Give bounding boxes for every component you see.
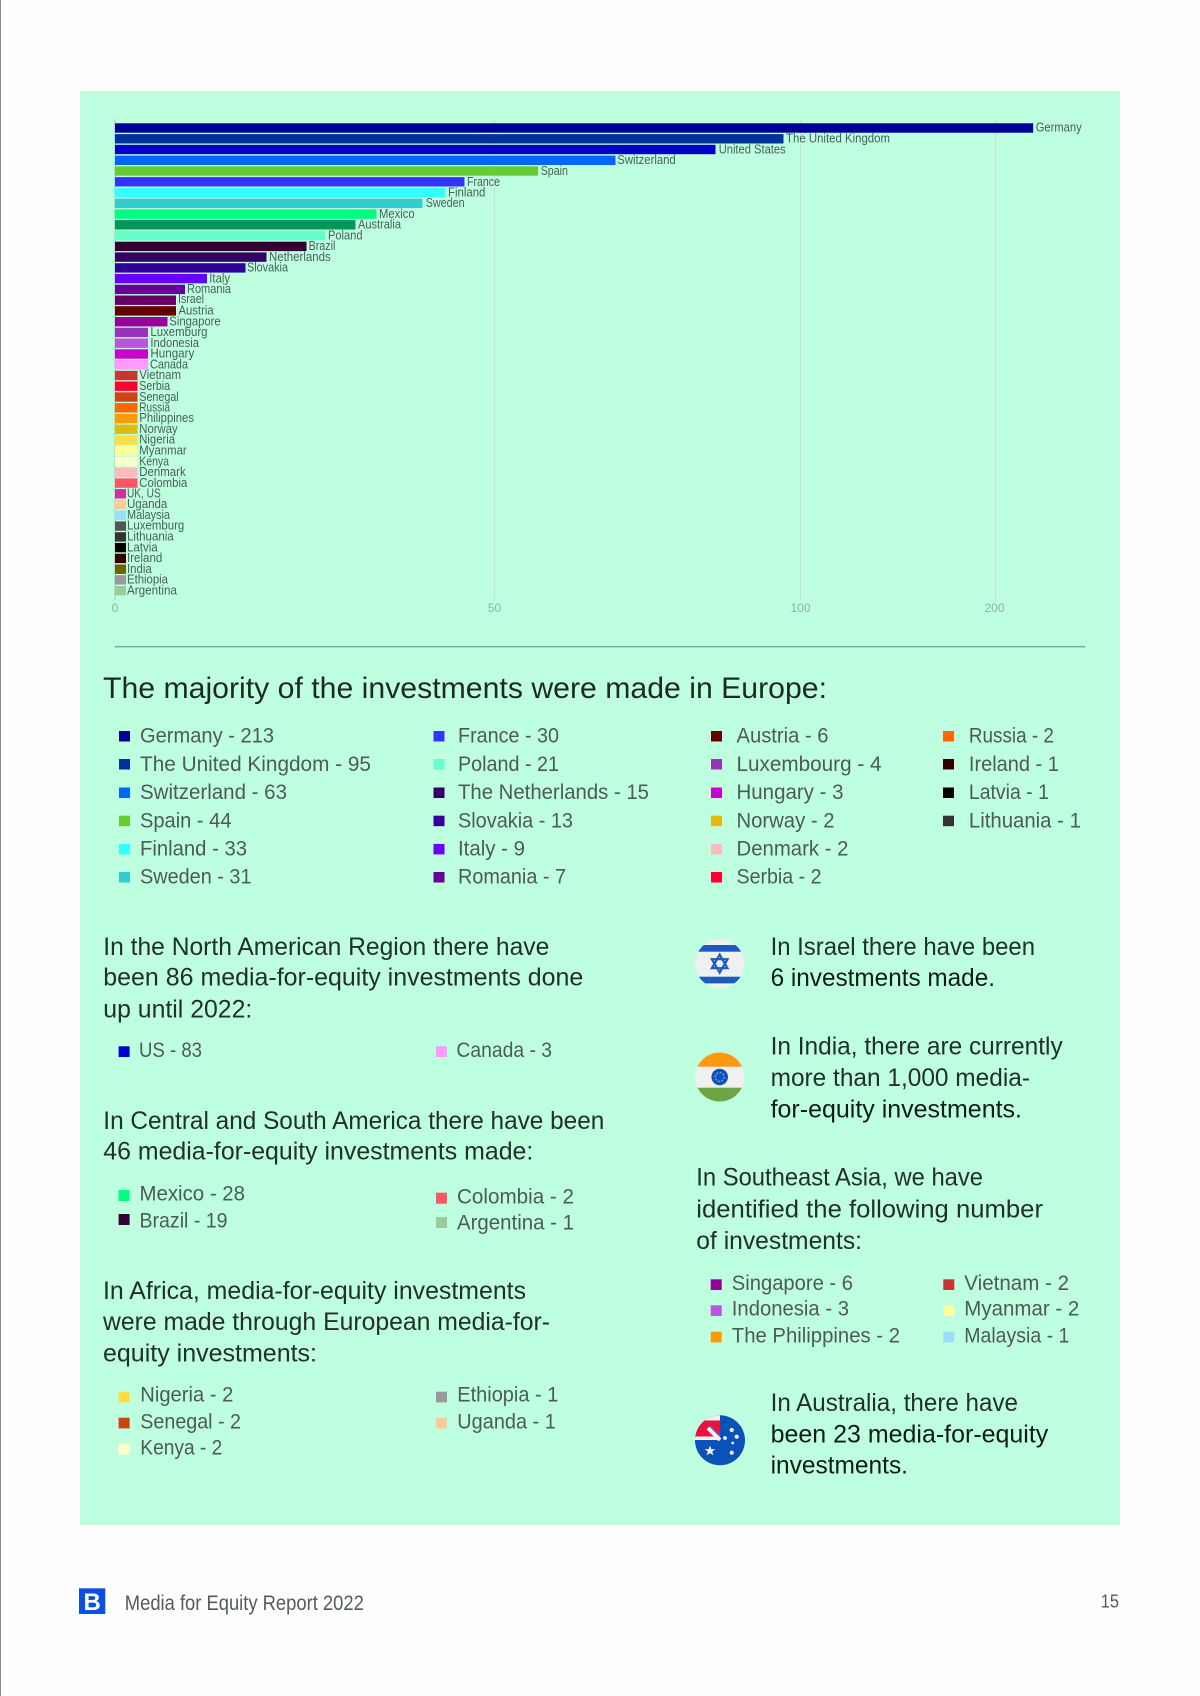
bar: Mexico: Mexico: [379, 207, 415, 221]
legend: Central and South America: Mexico - 28: [140, 1183, 245, 1206]
text block: North America: been 86 media-for-equity investments done: [103, 964, 583, 992]
legend: Southeast Asia: Indonesia - 3: [732, 1298, 849, 1321]
chart x axis labels: 100: [790, 601, 811, 615]
bar: Austria: Austria: [178, 304, 214, 318]
bar: Slovakia: Slovakia: [247, 260, 288, 274]
bar: Brazil: Brazil: [309, 239, 335, 253]
bar: Uganda: Uganda: [127, 497, 167, 511]
text block: North America: [103, 933, 583, 1024]
bar: Germany: Germany: [1036, 120, 1082, 134]
bar: Lithuania: Lithuania: [127, 530, 174, 544]
legend column 4: Lithuania - 1: [969, 809, 1081, 832]
bar: Mexico: [115, 207, 415, 221]
bar: Israel: Israel: [178, 292, 204, 306]
bar: Ireland: Ireland: [127, 551, 162, 565]
legend column 4: Russia - 2: [969, 725, 1054, 748]
bar: Senegal: Senegal: [139, 390, 179, 404]
bar: Vietnam: [115, 368, 181, 382]
bar: Colombia: [115, 476, 187, 490]
bar: Slovakia: [115, 260, 288, 274]
legend column 1: Germany - 213: [140, 725, 274, 748]
legend: Southeast Asia: Myanmar - 2: [964, 1298, 1079, 1321]
bar: Finland: [115, 186, 485, 200]
bar: Latvia: [115, 540, 158, 554]
bar: Nigeria: [115, 433, 175, 447]
text block: Central and South America: 46 media-for-equity investments made:: [103, 1138, 533, 1166]
legend: Africa: Kenya - 2: [140, 1437, 222, 1460]
bar: Brazil: [115, 239, 335, 253]
legend column 3: Austria - 6: [736, 725, 828, 748]
bar: France: [115, 175, 500, 189]
legend: Africa: Senegal - 2: [140, 1411, 241, 1434]
text block: Australia: In Australia, there have: [771, 1389, 1018, 1417]
text block: North America: In the North American Region there have: [103, 933, 549, 961]
bar: Argentina: Argentina: [127, 583, 177, 597]
bar: Luxemburg (second entry): Luxemburg: [127, 519, 184, 533]
bar: India: India: [127, 562, 152, 576]
icon: report logo: B: [84, 1589, 101, 1616]
bar: Kenya: Kenya: [139, 454, 169, 468]
bar: Philippines: Philippines: [139, 411, 194, 425]
text block: India: more than 1,000 media-: [771, 1064, 1030, 1092]
panel: investments overview: [80, 91, 1120, 1525]
bar: Austria: [115, 304, 214, 318]
text block: Southeast Asia: identified the following number: [696, 1195, 1043, 1223]
legend column 2: [434, 725, 649, 888]
text block: Australia: been 23 media-for-equity: [771, 1420, 1049, 1448]
legend: Central and South America: Argentina - 1: [457, 1211, 574, 1234]
legend column 1: Spain - 44: [140, 809, 232, 832]
bar: Israel: [115, 292, 204, 306]
bar: Indonesia: [115, 336, 199, 350]
bar: Norway: [115, 422, 178, 436]
bar: Russia: Russia: [139, 400, 170, 414]
bar: Russia: [115, 400, 170, 414]
bar: Singapore: Singapore: [169, 314, 221, 328]
bar: Colombia: Colombia: [139, 476, 187, 490]
bar: Myanmar: [115, 443, 187, 457]
bar: Spain: [115, 164, 568, 178]
bar: Spain: Spain: [541, 164, 568, 178]
bar: Singapore: [115, 314, 221, 328]
legend column 2: The Netherlands - 15: [458, 781, 649, 804]
footer: [79, 1588, 1119, 1616]
legend: Central and South America: Brazil - 19: [140, 1209, 228, 1232]
bar: The United Kingdom: [115, 132, 890, 146]
bar: Poland: Poland: [328, 228, 363, 242]
text block: Southeast Asia: [696, 1164, 1043, 1255]
chart x axis labels: 200: [984, 601, 1005, 615]
bar: Denmark: Denmark: [139, 465, 186, 479]
bar: Italy: Italy: [209, 272, 231, 286]
bar: Indonesia: Indonesia: [150, 336, 199, 350]
chart x axis labels: 50: [488, 601, 501, 615]
legend column 3: Norway - 2: [736, 809, 834, 832]
bar: France: France: [467, 175, 500, 189]
text block: Africa: equity investments:: [103, 1340, 317, 1368]
chart x axis labels: 0: [112, 601, 119, 615]
legend: Southeast Asia: Singapore - 6: [732, 1272, 853, 1295]
icon: report logo: [79, 1588, 105, 1616]
legend column 2: Romania - 7: [458, 865, 566, 888]
legend column 2: France - 30: [458, 725, 559, 748]
legend column 1: The United Kingdom - 95: [140, 753, 371, 776]
text block: Southeast Asia: In Southeast Asia, we have: [696, 1164, 983, 1192]
bar: Netherlands: [115, 250, 331, 264]
text block: Central and South America: [103, 1107, 604, 1166]
chart: investments per country bar chart: [112, 119, 1082, 615]
text block: Israel: 6 investments made.: [771, 964, 995, 992]
legend column 3: Serbia - 2: [736, 865, 822, 888]
legend: North America: US - 83: [139, 1039, 202, 1062]
text block: Southeast Asia: of investments:: [696, 1227, 862, 1255]
bar: Philippines: [115, 411, 194, 425]
bar: Sweden: [115, 196, 465, 210]
bar: Poland: [115, 228, 363, 242]
bar: Netherlands: Netherlands: [269, 250, 331, 264]
legend column 3: [711, 725, 882, 888]
legend: Southeast Asia: [711, 1272, 1079, 1348]
heading: Europe: The majority of the investments were made in Europe:: [103, 672, 827, 705]
bar: Italy: [115, 272, 231, 286]
bar: UK, US: UK, US: [127, 486, 161, 500]
text block: Israel: In Israel there have been: [771, 933, 1035, 961]
legend: Southeast Asia: Vietnam - 2: [964, 1272, 1069, 1295]
legend column 1: Finland - 33: [140, 837, 247, 860]
legend column 3: Hungary - 3: [736, 781, 844, 804]
bar: Hungary: Hungary: [150, 347, 195, 361]
text block: Israel: [771, 933, 1035, 992]
bar: Switzerland: [115, 153, 676, 167]
bar: Malaysia: Malaysia: [127, 508, 170, 522]
bar: Australia: Australia: [358, 218, 401, 232]
bar: Germany: [115, 120, 1082, 134]
bar: Canada: [115, 357, 188, 371]
bar: Sweden: Sweden: [426, 196, 465, 210]
icon: Israel flag: [695, 939, 745, 988]
legend column 2: Italy - 9: [458, 837, 525, 860]
bar: India: [115, 562, 152, 576]
legend: Europe country list: [119, 725, 1081, 888]
legend: Africa: Nigeria - 2: [140, 1384, 233, 1407]
bar: UK, US: [115, 486, 161, 500]
bar: Kenya: [115, 454, 169, 468]
bar: Canada: Canada: [150, 357, 188, 371]
legend column 1: Sweden - 31: [140, 865, 252, 888]
legend column 1: Switzerland - 63: [140, 781, 287, 804]
footer title: Media for Equity Report 2022: [125, 1592, 364, 1615]
text block: India: for-equity investments.: [771, 1095, 1022, 1123]
legend column 1: [119, 725, 371, 888]
bar: Serbia: [115, 379, 170, 393]
bar: Vietnam: Vietnam: [139, 368, 181, 382]
bar: Denmark: [115, 465, 186, 479]
bar: United States: [115, 142, 786, 156]
legend: Africa: Ethiopia - 1: [457, 1384, 558, 1407]
legend: Central and South America: Colombia - 2: [457, 1185, 574, 1208]
legend: North America: [119, 1039, 552, 1062]
legend column 4: Latvia - 1: [969, 781, 1049, 804]
bar: Luxemburg: Luxemburg: [150, 325, 208, 339]
bar: Luxemburg: [115, 325, 208, 339]
text block: Australia: investments.: [771, 1451, 908, 1479]
legend column 4: Ireland - 1: [969, 753, 1059, 776]
legend: Africa: Uganda - 1: [457, 1411, 556, 1434]
bar: Australia: [115, 218, 401, 232]
legend column 3: Denmark - 2: [736, 837, 848, 860]
text block: North America: up until 2022:: [103, 996, 252, 1024]
text block: India: In India, there are currently: [771, 1032, 1063, 1060]
icon: India flag: [695, 1052, 745, 1103]
bar: Myanmar: Myanmar: [139, 443, 187, 457]
text block: India: [771, 1032, 1063, 1123]
text block: Australia: [771, 1389, 1049, 1479]
page number: 15: [1101, 1591, 1119, 1611]
legend: Central and South America: [119, 1183, 574, 1234]
bar: The United Kingdom: The United Kingdom: [786, 132, 890, 146]
text block: Africa: [102, 1277, 550, 1368]
bar: Serbia: Serbia: [139, 379, 170, 393]
bar: Latvia: Latvia: [127, 540, 158, 554]
bar: Nigeria: Nigeria: [139, 433, 175, 447]
bar: Finland: Finland: [448, 186, 485, 200]
bar: Norway: Norway: [139, 422, 178, 436]
legend column 2: Poland - 21: [458, 753, 559, 776]
legend column 3: Luxembourg - 4: [736, 753, 882, 776]
legend: Africa: [119, 1384, 558, 1460]
bar: Romania: [115, 282, 231, 296]
bar: Switzerland: Switzerland: [617, 153, 676, 167]
text block: Africa: In Africa, media-for-equity investments: [103, 1277, 526, 1305]
legend: Southeast Asia: Malaysia - 1: [964, 1325, 1069, 1348]
text block: Africa: were made through European media-for-: [102, 1308, 550, 1336]
chart x axis labels: [112, 601, 1005, 615]
text block: Central and South America: In Central and South America there have been: [103, 1107, 604, 1135]
legend: North America: Canada - 3: [456, 1039, 552, 1062]
bar: Ethiopia: Ethiopia: [127, 572, 168, 586]
bar: Hungary: [115, 347, 195, 361]
bar: Senegal: [115, 390, 179, 404]
bar: Romania: Romania: [187, 282, 231, 296]
legend column 2: Slovakia - 13: [458, 809, 573, 832]
legend: Southeast Asia: The Philippines - 2: [732, 1325, 900, 1348]
icon: Australia flag: [695, 1415, 745, 1465]
legend column 4: [943, 725, 1081, 832]
bar: United States: United States: [719, 142, 786, 156]
